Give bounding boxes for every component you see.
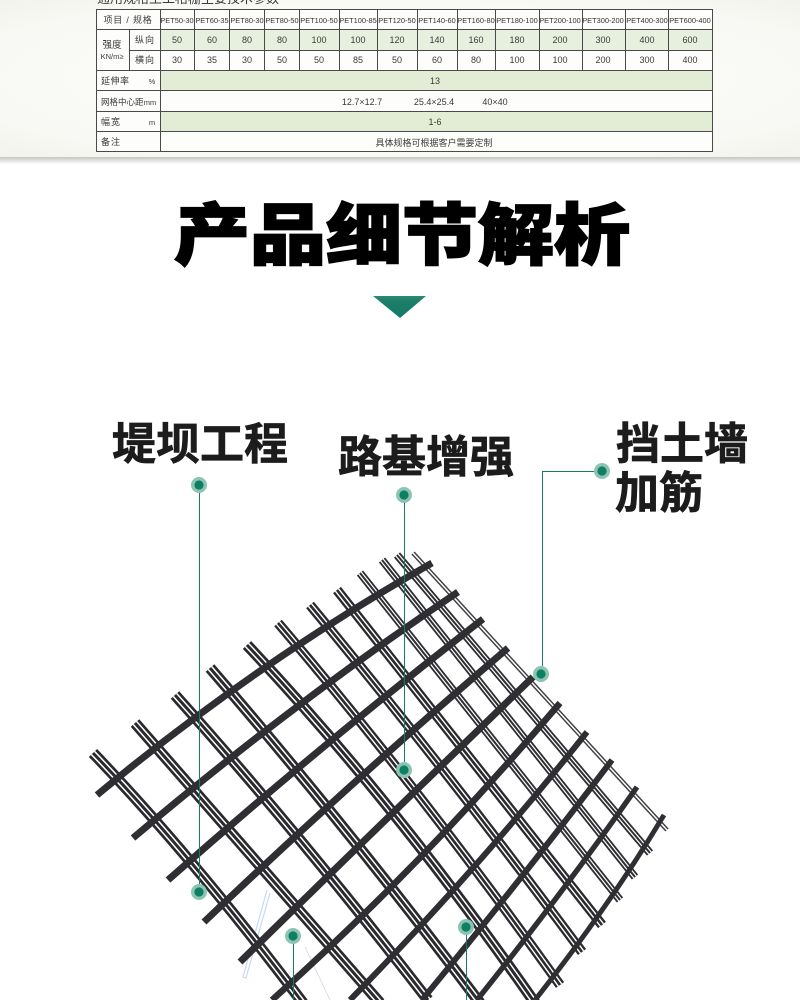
transverse strength values: 200 — [595, 55, 611, 65]
table column headers: PET600-400 — [669, 16, 711, 25]
merged row values: 13 — [430, 76, 440, 86]
callout: 路基增强 — [338, 433, 514, 778]
transverse strength values: 30 — [242, 55, 252, 65]
transverse strength values: 50 — [392, 55, 402, 65]
longitudinal strength values: 400 — [639, 35, 655, 45]
table row headings: 网格中心距 — [101, 97, 144, 107]
table grid — [96, 9, 713, 152]
table column headers — [160, 16, 711, 25]
table row headings: 横向 — [135, 54, 155, 65]
transverse strength values: 50 — [277, 55, 287, 65]
merged row values: 具体规格可根据客户需要定制 — [375, 137, 493, 148]
merged row values: 25.4×25.4 — [414, 97, 454, 107]
merged row values: 40×40 — [482, 97, 508, 107]
table column headers: PET60-35 — [195, 16, 229, 25]
table column headers: PET50-30 — [160, 16, 194, 25]
longitudinal strength values — [172, 35, 698, 45]
table column headers: PET180-100 — [496, 16, 538, 25]
transverse strength values: 35 — [207, 55, 217, 65]
longitudinal strength values: 60 — [207, 35, 217, 45]
panel: specification table background — [0, 0, 800, 164]
longitudinal strength values: 100 — [350, 35, 366, 45]
table row headings: 幅宽 — [101, 116, 121, 127]
transverse strength values: 85 — [353, 55, 363, 65]
transverse strength values: 60 — [432, 55, 442, 65]
transverse strength values: 50 — [314, 55, 324, 65]
table column headers: PET100-85 — [339, 16, 377, 25]
table row headings: 项目 / 规格 — [103, 14, 153, 25]
callout markers: lower mesh points — [285, 919, 474, 1000]
longitudinal strength values: 120 — [389, 35, 405, 45]
longitudinal strength values: 300 — [595, 35, 611, 45]
longitudinal strength values: 160 — [468, 35, 484, 45]
table column headers: PET120-50 — [378, 16, 416, 25]
table row headings — [101, 14, 156, 147]
table row headings: KN/m≥ — [101, 52, 123, 61]
table column headers: PET200-100 — [539, 16, 581, 25]
table row headings: mm — [144, 98, 156, 107]
table column headers: PET80-30 — [230, 16, 264, 25]
table row headings: 备注 — [101, 136, 121, 147]
longitudinal strength values: 50 — [172, 35, 182, 45]
transverse strength values: 100 — [509, 55, 525, 65]
longitudinal strength values: 200 — [552, 35, 568, 45]
transverse strength values: 80 — [471, 55, 481, 65]
table column headers: PET80-50 — [265, 16, 299, 25]
callout: 挡土墙加筋: 加筋 — [615, 469, 703, 518]
longitudinal strength values: 80 — [242, 35, 252, 45]
longitudinal strength values: 180 — [509, 35, 525, 45]
transverse strength values: 30 — [172, 55, 182, 65]
image: geogrid mesh — [93, 553, 667, 1000]
table row headings: 延伸率 — [101, 75, 130, 86]
transverse strength values — [172, 55, 698, 65]
table column headers: PET160-80 — [457, 16, 495, 25]
table column headers: PET300-200 — [582, 16, 624, 25]
table column headers: PET400-300 — [626, 16, 668, 25]
callout: 挡土墙加筋 — [533, 420, 748, 682]
merged row values: 1-6 — [428, 117, 442, 127]
longitudinal strength values: 600 — [682, 35, 698, 45]
table column headers: PET100-50 — [300, 16, 338, 25]
longitudinal strength values: 140 — [429, 35, 445, 45]
table row headings: % — [149, 77, 156, 86]
table row headings: 强度 — [102, 39, 122, 51]
callout: 堤坝工程 — [112, 420, 288, 900]
transverse strength values: 300 — [639, 55, 655, 65]
table row headings: 纵向 — [135, 34, 155, 45]
icon: downward triangle — [373, 296, 426, 318]
merged row values: 12.7×12.7 — [342, 97, 382, 107]
merged row values — [342, 76, 508, 148]
heading: product detail analysis: 产品细节解析 — [174, 199, 630, 274]
transverse strength values: 400 — [682, 55, 698, 65]
callout: 路基增强: 路基增强 — [338, 433, 514, 482]
specification table — [96, 0, 713, 152]
longitudinal strength values: 100 — [311, 35, 327, 45]
table column headers: PET140-60 — [418, 16, 456, 25]
longitudinal strength values: 80 — [277, 35, 287, 45]
table row headings: m — [149, 118, 155, 127]
callout: 堤坝工程: 堤坝工程 — [112, 420, 288, 469]
callout: 挡土墙加筋: 挡土墙 — [616, 420, 748, 469]
table rows — [96, 9, 713, 152]
transverse strength values: 100 — [552, 55, 568, 65]
